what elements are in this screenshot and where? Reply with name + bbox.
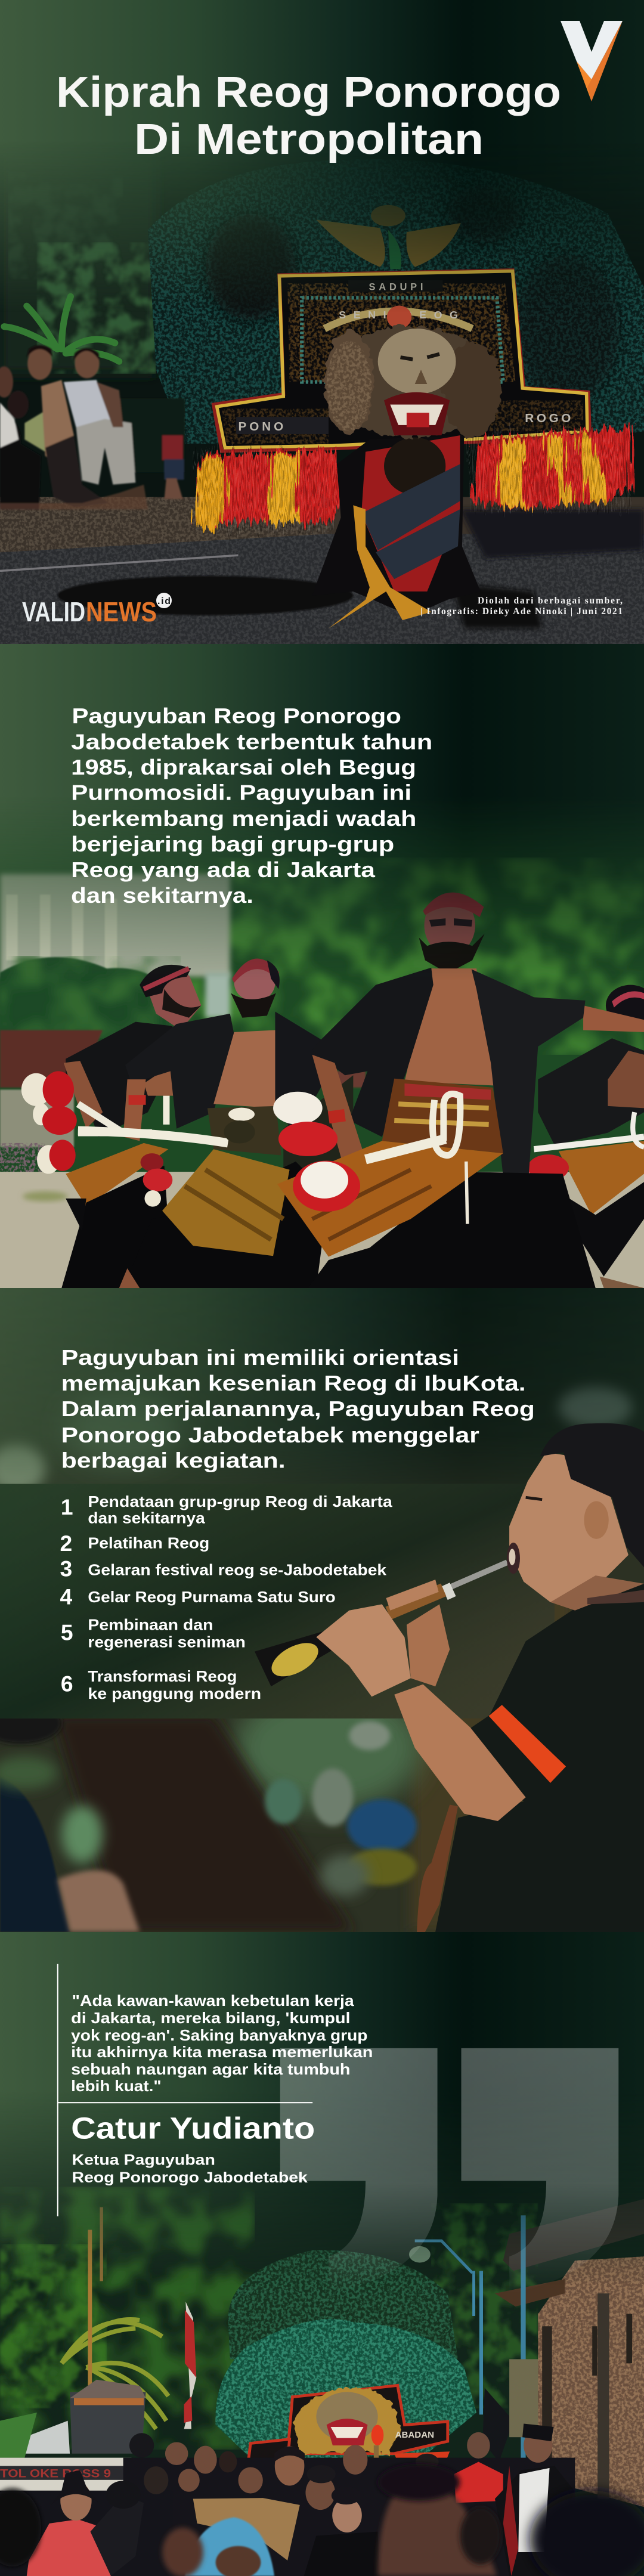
icon: Validnews V logo — [561, 21, 623, 101]
photo: peacock feather fan — [215, 2250, 476, 2462]
illustration: golden peacock emblem — [316, 205, 461, 269]
label: bus lettering: TOL OKE ROSS 9 — [0, 2468, 111, 2481]
text block: paguyuban history: Paguyuban Reog Ponorogo — [72, 704, 401, 728]
text block: paguyuban history: Purnomosidi. Paguyuban ini — [71, 781, 411, 805]
text block: paguyuban history: berkembang menjadi wadah — [71, 807, 416, 831]
text backdrop gradient — [0, 644, 644, 981]
list item 6 — [61, 1668, 261, 1702]
text block: paguyuban history: 1985, diprakarsai oleh Begug — [71, 756, 416, 779]
text block: quote — [71, 1993, 373, 2095]
illustration: red and yellow fringes — [193, 427, 633, 532]
source credit: Diolah dari berbagai sumber, — [478, 596, 623, 606]
text block: paguyuban history: Reog yang ada di Jakarta — [71, 858, 376, 882]
list item 2: 2 — [60, 1531, 72, 1556]
text block: orientation paragraph: memajukan kesenian Reog di IbuKota. — [61, 1371, 526, 1395]
label: PONO: PONO — [238, 420, 283, 434]
speaker role: Reog Ponorogo Jabodetabek — [72, 2170, 308, 2186]
title: Kiprah Reog Ponorogo — [56, 69, 561, 116]
photo: fourth dancer on the right — [419, 985, 644, 1288]
text block: paguyuban history: dan sekitarnya. — [71, 884, 253, 908]
panel: translucent list band — [0, 1484, 555, 1719]
list item 6: ke panggung modern — [88, 1686, 261, 1702]
photo: lead dancer — [273, 893, 644, 1288]
list item 2 — [60, 1531, 209, 1556]
speaker role: Ketua Paguyuban — [72, 2153, 215, 2169]
logo: VALIDNEWS.id wordmark: NEWS — [86, 596, 157, 627]
text block: paguyuban history: berjejaring bagi grup-grup — [71, 832, 394, 856]
photo: seated spectators — [0, 345, 185, 509]
label: ROGO: ROGO — [525, 411, 571, 425]
illustration: reog mask in the parade — [249, 2385, 450, 2481]
text block: orientation paragraph: Ponorogo Jabodetabek menggelar — [61, 1423, 479, 1447]
panel: history of the paguyuban with dancers — [0, 644, 644, 1288]
photo: trees and field background — [0, 644, 644, 1288]
photo: blurred park background — [0, 1288, 644, 1932]
photo: tree and peacock backdrop — [0, 144, 644, 444]
panel: activities with flute player — [0, 1288, 644, 1932]
text block: orientation paragraph: berbagai kegiatan. — [61, 1449, 286, 1473]
illustration: dadak merak frame — [213, 270, 590, 451]
photo: second dancer — [78, 959, 337, 1288]
label: SENI REOG: SENI REOG — [339, 309, 458, 321]
source credit — [420, 596, 623, 617]
list item 5 — [61, 1617, 246, 1651]
logo: VALIDNEWS.id wordmark — [22, 593, 172, 627]
list item 5: regenerasi seniman — [88, 1634, 246, 1651]
photo: parade crowd — [0, 2423, 644, 2576]
label: SADUPI: SADUPI — [369, 281, 423, 292]
text block: quote: yok reog-an'. Saking banyaknya grup — [71, 2027, 367, 2044]
list item 1: 1 — [61, 1494, 73, 1519]
list item 3 — [60, 1556, 387, 1581]
top text gradient — [0, 1288, 644, 1485]
icon: large closing quotation mark — [280, 2048, 618, 2293]
title backdrop gradient — [0, 0, 644, 312]
list item 1: Pendataan grup-grup Reog di Jakarta — [88, 1494, 393, 1510]
speaker name: Catur Yudianto — [71, 2111, 315, 2145]
logo: VALIDNEWS.id wordmark: VALID — [22, 596, 85, 627]
panel: quote with reog parade crowd — [0, 1932, 644, 2576]
list item 2: Pelatihan Reog — [88, 1535, 209, 1552]
list item 4 — [60, 1584, 336, 1609]
text block: paguyuban history: Jabodetabek terbentuk tahun — [71, 730, 432, 754]
list item 1: dan sekitarnya — [88, 1510, 206, 1527]
photo: ground and road — [0, 497, 644, 644]
photo: flute player — [255, 1423, 644, 1932]
text block: orientation paragraph: Dalam perjalanannya, Paguyuban Reog — [61, 1397, 535, 1421]
source credit: | Infografis: Dieky Ade Ninoki | Juni 2021 — [420, 606, 623, 617]
list item 3: Gelaran festival reog se-Jabodetabek — [88, 1562, 387, 1578]
text block: quote: di Jakarta, mereka bilang, 'kumpul — [71, 2010, 351, 2027]
text block: paguyuban history — [71, 704, 432, 908]
list item 3: 3 — [60, 1556, 72, 1581]
photo: brick houses on the right — [409, 2199, 644, 2507]
label: ABADAN: ABADAN — [395, 2430, 434, 2440]
text block: orientation paragraph: Paguyuban ini memiliki orientasi — [61, 1346, 459, 1370]
list item 1 — [61, 1494, 393, 1527]
title: Di Metropolitan — [134, 116, 484, 163]
list: six activities — [60, 1494, 393, 1702]
list item 4: 4 — [60, 1584, 73, 1609]
photo: village street background — [0, 1932, 644, 2576]
text backdrop gradient — [0, 1932, 644, 2285]
list item 6: Transformasi Reog — [88, 1668, 237, 1685]
list item 6: 6 — [61, 1671, 73, 1696]
illustration: tiger head and dancer — [312, 327, 501, 628]
panel: cover with reog mask photo — [0, 0, 644, 644]
list item 5: 5 — [61, 1620, 73, 1645]
list item 5: Pembinaan dan — [88, 1617, 213, 1634]
logo: VALIDNEWS.id wordmark: .id — [157, 596, 171, 606]
quote frame lines — [57, 1964, 312, 2216]
text block: quote: sebuah naungan agar kita tumbuh — [71, 2061, 351, 2078]
title — [56, 69, 561, 163]
text block: quote: itu akhirnya kita merasa memerlukan — [71, 2044, 373, 2061]
text block: quote: "Ada kawan-kawan kebetulan kerja — [72, 1993, 355, 2010]
text block: quote: lebih kuat." — [71, 2078, 162, 2095]
speaker role — [72, 2153, 308, 2186]
list item 4: Gelar Reog Purnama Satu Suro — [88, 1589, 336, 1606]
text block: orientation paragraph — [61, 1346, 535, 1473]
photo: first dancer — [21, 965, 202, 1288]
